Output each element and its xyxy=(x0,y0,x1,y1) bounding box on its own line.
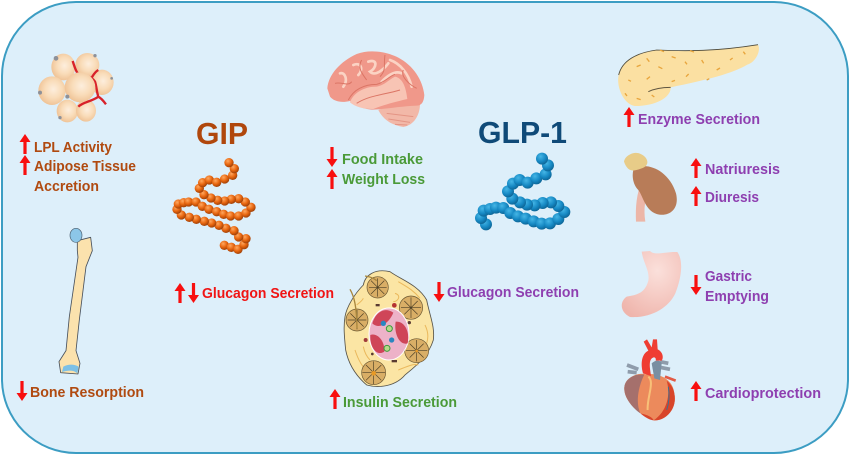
icon: GLP-1 peptide chain xyxy=(475,153,570,230)
arrow: down xyxy=(690,275,702,295)
arrow: down xyxy=(434,282,444,302)
label: Weight Loss xyxy=(342,172,425,188)
label line 1: Adipose Tissue xyxy=(34,159,136,175)
callout: natriuresis xyxy=(690,158,780,178)
icon: adipose tissue xyxy=(38,53,114,122)
icon: pancreatic islet tissue xyxy=(344,271,434,387)
arrow: up xyxy=(20,134,30,154)
callout: cardioprotection xyxy=(690,381,821,402)
icon: stomach xyxy=(622,251,681,317)
icon: femur bone xyxy=(59,228,92,374)
icon: brain xyxy=(327,51,424,127)
label: Insulin Secretion xyxy=(343,395,457,411)
arrow: down xyxy=(188,283,199,303)
arrow: up xyxy=(174,283,186,303)
arrow: down xyxy=(326,147,338,167)
arrow: up xyxy=(690,158,702,178)
icon: heart xyxy=(624,339,676,420)
callout: weight loss xyxy=(326,169,425,189)
arrow: up xyxy=(330,389,340,409)
label: Glucagon Secretion xyxy=(202,286,334,302)
icon: GIP peptide chain xyxy=(172,158,256,254)
callout: gastric emptying xyxy=(690,269,769,305)
callout: diuresis xyxy=(690,186,759,206)
icon: pancreas xyxy=(618,45,759,106)
label: Glucagon Secretion xyxy=(447,285,579,301)
label line 2: Accretion xyxy=(34,179,99,195)
arrow: up xyxy=(326,169,338,189)
callout: GIP glucagon secretion xyxy=(174,283,334,303)
callout: enzyme secretion xyxy=(624,107,760,128)
label: Bone Resorption xyxy=(30,385,144,401)
label: Diuresis xyxy=(705,190,759,206)
callout: insulin secretion xyxy=(330,389,457,411)
label: Natriuresis xyxy=(705,162,780,178)
callout: food intake xyxy=(326,147,423,168)
arrow: up xyxy=(20,155,30,175)
callout: adipose tissue accretion xyxy=(20,155,136,195)
label line 2: Emptying xyxy=(705,289,769,305)
label: LPL Activity xyxy=(34,140,112,156)
icon: kidney xyxy=(624,153,677,222)
callout: bone resorption xyxy=(16,381,144,401)
label: Enzyme Secretion xyxy=(638,112,760,128)
heading: GIP: GIP xyxy=(196,116,248,151)
callout: GLP-1 glucagon secretion xyxy=(434,282,579,302)
callout: LPL activity xyxy=(20,134,112,156)
label: Cardioprotection xyxy=(705,386,821,402)
label: Food Intake xyxy=(342,152,423,168)
heading: GLP-1: GLP-1 xyxy=(478,115,567,150)
label line 1: Gastric xyxy=(705,269,752,285)
arrow: down xyxy=(16,381,28,401)
arrow: up xyxy=(690,381,702,401)
arrow: up xyxy=(624,107,634,127)
arrow: up xyxy=(690,186,702,206)
